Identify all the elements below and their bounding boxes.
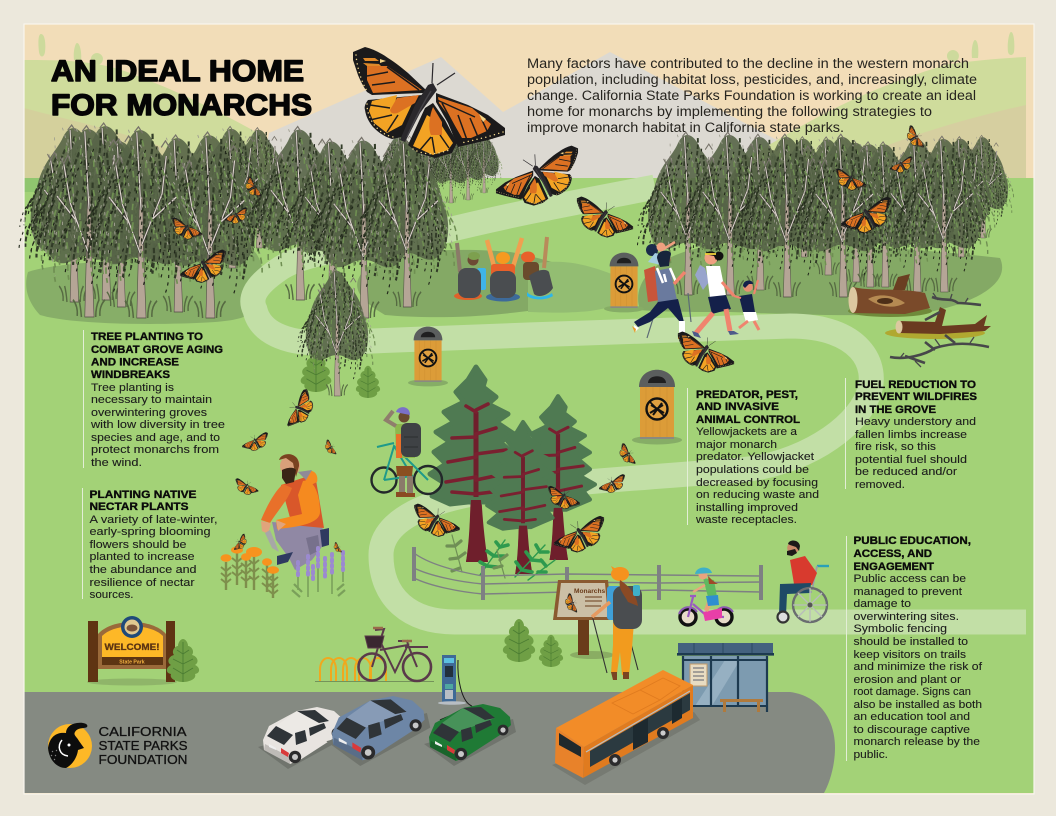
text block: fuel reduction: fallen limbs increase	[855, 429, 967, 441]
icon: waste receptacle left	[408, 327, 448, 386]
text block: public education: should be installed to	[854, 636, 968, 648]
text block: tree planting: WINDBREAKS	[91, 369, 170, 381]
text block: public education: an education tool and	[854, 711, 970, 723]
text block: predator and pest control	[687, 388, 819, 526]
plant: fern by welcome sign	[167, 639, 199, 682]
text block: predator and pest control: installing improved	[696, 502, 798, 514]
text block: predator and pest control: populations could be	[696, 464, 809, 476]
text block: public education: PUBLIC EDUCATION,	[854, 535, 971, 547]
text block: predator and pest control: predator. Yellowjacket	[696, 451, 815, 463]
text block: native nectar plants: NECTAR PLANTS	[90, 501, 188, 513]
text block: predator and pest control: decreased by focusing	[696, 477, 818, 489]
parked bicycle with basket	[358, 628, 431, 681]
text block: fuel reduction: fire risk, so this	[855, 441, 936, 453]
trees: background grove	[375, 123, 503, 205]
text block: tree planting	[83, 330, 225, 469]
text block: tree planting: COMBAT GROVE AGING	[91, 344, 223, 356]
plants: young shoots under redwoods	[447, 535, 555, 580]
person: cyclist looking through binoculars	[372, 407, 442, 497]
text block: predator and pest control: on reducing waste and	[696, 489, 819, 501]
plant: fern by interpretive sign	[503, 619, 535, 662]
title: AN IDEAL HOME	[51, 55, 304, 88]
welcome sign: State Park	[119, 660, 145, 666]
interpretive sign: Monarchs: Monarchs	[574, 588, 605, 595]
logo: California State Parks Foundation: STATE PARKS	[98, 738, 188, 753]
text block: public education: to discourage captive	[854, 724, 970, 736]
car: blue SUV	[326, 696, 430, 766]
text block: native nectar plants	[82, 488, 218, 601]
car: green sedan charging	[424, 704, 516, 766]
bike rack	[315, 658, 434, 682]
text block: fuel reduction: potential fuel should	[855, 454, 967, 466]
people: hiking family	[632, 242, 759, 339]
text block: native nectar plants: PLANTING NATIVE	[90, 489, 196, 501]
text block: public education: erosion and plant or	[854, 674, 961, 686]
intro paragraph	[527, 56, 977, 135]
title	[51, 55, 312, 122]
text block: tree planting: the wind.	[91, 457, 142, 469]
logo: California State Parks Foundation: FOUNDATION	[98, 752, 188, 767]
fence	[414, 547, 761, 600]
text block: tree planting: species and age, and to	[91, 432, 220, 444]
text block: predator and pest control: ANIMAL CONTROL	[696, 414, 800, 426]
intro paragraph: improve monarch habitat in California state parks.	[527, 120, 844, 135]
text block: tree planting: TREE PLANTING TO	[91, 331, 203, 343]
text block: fuel reduction: removed.	[855, 479, 905, 491]
trees: right eucalyptus grove	[633, 123, 1015, 297]
person: hiker reading sign	[592, 566, 642, 680]
person: child on bike	[679, 567, 733, 625]
text block: predator and pest control: AND INVASIVE	[696, 401, 779, 413]
text block: native nectar plants: the abundance and	[90, 564, 196, 576]
text block: public education: overwintering sites.	[854, 611, 959, 623]
text block: public education: Symbolic fencing	[854, 623, 947, 635]
text block: public education: monarch release by the	[854, 736, 980, 748]
logo: California State Parks Foundation	[48, 723, 188, 768]
text block: tree planting: AND INCREASE	[91, 356, 179, 368]
text block: public education: public.	[854, 749, 888, 761]
text block: native nectar plants: planted to increase	[90, 551, 194, 563]
text block: tree planting: necessary to maintain	[91, 394, 212, 406]
text block: native nectar plants: sources.	[90, 589, 134, 601]
title: FOR MONARCHS	[51, 89, 312, 122]
plants: native orange flowers	[220, 546, 279, 598]
text block: public education: managed to prevent	[854, 586, 963, 598]
text block: tree planting: with low diversity in tree	[90, 419, 225, 431]
panel: meadow ground	[24, 178, 1034, 793]
redwood trees	[430, 367, 595, 574]
text block: public education: ENGAGEMENT	[854, 561, 934, 573]
icon: waste receptacle near trail	[604, 253, 644, 312]
text block: fuel reduction: Heavy understory and	[855, 416, 976, 428]
intro paragraph: Many factors have contributed to the decline in the western monarch	[527, 56, 969, 71]
monarch butterfly: large hero	[353, 47, 505, 158]
intro paragraph: change. California State Parks Foundation is working to create an ideal	[527, 88, 976, 103]
text block: predator and pest control: Yellowjackets are a	[696, 426, 798, 438]
logo: California State Parks Foundation: CALIFORNIA	[98, 724, 187, 739]
text block: public education: Public access can be	[854, 573, 966, 585]
bus shelter	[677, 643, 774, 712]
plants: native purple flowers	[292, 548, 345, 597]
fallen logs and dead limbs	[848, 274, 991, 367]
person: visitor in wheelchair	[778, 540, 829, 622]
person: gardener kneeling	[261, 454, 329, 570]
car: white hatchback	[258, 707, 350, 769]
text block: native nectar plants: flowers should be	[90, 539, 186, 551]
text block: fuel reduction	[845, 378, 977, 491]
intro paragraph: home for monarchs by implementing the following strategies to	[527, 104, 932, 119]
text block: native nectar plants: early-spring blooming	[90, 526, 210, 538]
plants: ferns around foreground tree	[301, 351, 380, 398]
text block: public education: and minimize the risk of	[854, 661, 983, 673]
trees: left eucalyptus grove	[15, 113, 460, 318]
text block: native nectar plants: resilience of nectar	[90, 577, 195, 589]
text block: public education: also be installed as both	[854, 699, 982, 711]
text block: fuel reduction: IN THE GROVE	[855, 404, 936, 416]
tree: foreground eucalyptus	[294, 261, 377, 396]
welcome sign	[87, 616, 177, 686]
plant: small fern	[539, 635, 563, 667]
monarch butterflies in flight	[172, 125, 930, 554]
bus	[552, 670, 700, 785]
text block: tree planting: Tree planting is	[91, 382, 174, 394]
text block: fuel reduction: be reduced and/or	[855, 466, 957, 478]
text block: predator and pest control: major monarch	[696, 439, 777, 451]
text block: fuel reduction: FUEL REDUCTION TO	[855, 379, 976, 391]
icon: waste receptacle large	[632, 370, 682, 444]
people: three visitors sitting and watching	[454, 237, 553, 302]
text block: public education: keep visitors on trails	[854, 649, 966, 661]
welcome sign: WELCOME!	[104, 642, 160, 653]
EV charging station	[438, 655, 472, 720]
text block: tree planting: protect monarchs from	[91, 444, 219, 456]
road and parking lot	[24, 692, 835, 793]
text block: native nectar plants: A variety of late-winter,	[90, 514, 218, 526]
intro paragraph: population, including habitat loss, pesticides, and, increasingly, climate	[527, 72, 977, 87]
text block: public education: root damage. Signs can	[854, 686, 971, 698]
path: winding trail	[253, 187, 1026, 622]
text block: fuel reduction: PREVENT WILDFIRES	[855, 391, 977, 403]
text block: public education: ACCESS, AND	[854, 548, 932, 560]
text block: predator and pest control: PREDATOR, PEST,	[696, 389, 798, 401]
text block: public education: damage to	[854, 598, 911, 610]
text block: tree planting: overwintering groves	[91, 407, 207, 419]
interpretive sign: Monarchs	[553, 580, 614, 659]
text block: public education	[846, 535, 983, 761]
text block: predator and pest control: waste receptacles.	[695, 514, 797, 526]
